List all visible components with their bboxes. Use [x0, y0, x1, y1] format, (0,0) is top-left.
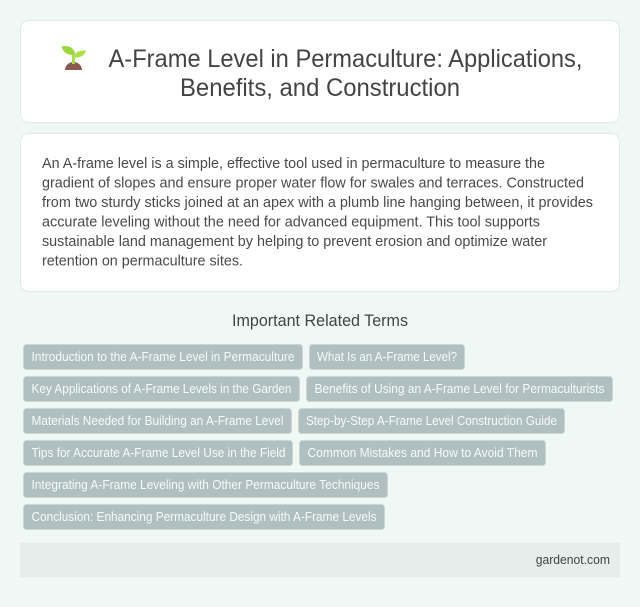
tag: Benefits of Using an A-Frame Level for Permaculturists [314, 381, 604, 396]
text block: description paragraph: An A-frame level is a simple, effective tool used in permaculture to measure the [42, 156, 545, 172]
icon: sprout [62, 46, 86, 70]
title: Benefits, and Construction [180, 74, 460, 102]
tag: Common Mistakes and How to Avoid Them [308, 445, 538, 460]
panel: related term tags [24, 344, 612, 530]
text block: description paragraph: gradient of slopes and ensure proper water flow for swales and terraces. Constructed [42, 176, 584, 192]
heading: important related terms: Important Related Terms [232, 312, 408, 330]
text block: description paragraph: from two sturdy sticks joined at an apex with a plumb line hanging between, it provides [42, 195, 593, 211]
tag: Introduction to the A-Frame Level in Permaculture [32, 349, 294, 364]
panel: title header [20, 20, 620, 122]
tag [24, 376, 300, 402]
tag: Tips for Accurate A-Frame Level Use in the Field [32, 445, 286, 460]
tag: Materials Needed for Building an A-Frame Level [32, 413, 284, 428]
tag [298, 408, 564, 434]
tag [24, 504, 384, 530]
text block: description paragraph: sustainable land management by helping to prevent erosion and optimize water [42, 234, 547, 250]
tag: Key Applications of A-Frame Levels in the Garden [32, 381, 292, 396]
tag [300, 440, 546, 466]
tag: Integrating A-Frame Leveling with Other Permaculture Techniques [32, 477, 380, 492]
tag [310, 344, 464, 370]
tag [24, 408, 292, 434]
text block: description paragraph: accurate leveling without the need for advanced equipment. This tool supports [42, 214, 540, 230]
panel: description [20, 134, 620, 292]
tag [24, 440, 292, 466]
text block: description paragraph: retention on permaculture sites. [42, 254, 243, 270]
tag: Step-by-Step A-Frame Level Construction Guide [306, 413, 557, 428]
tag [24, 472, 388, 498]
title: A-Frame Level in Permaculture: Applications, [108, 45, 582, 73]
tag [306, 376, 612, 402]
text block: description paragraph [42, 156, 593, 270]
footer site name: gardenot.com [536, 552, 610, 567]
tag: What Is an A-Frame Level? [317, 349, 457, 364]
title [108, 45, 582, 102]
tag: Conclusion: Enhancing Permaculture Design with A-Frame Levels [32, 509, 376, 524]
tag [24, 344, 302, 370]
footer [20, 543, 620, 577]
